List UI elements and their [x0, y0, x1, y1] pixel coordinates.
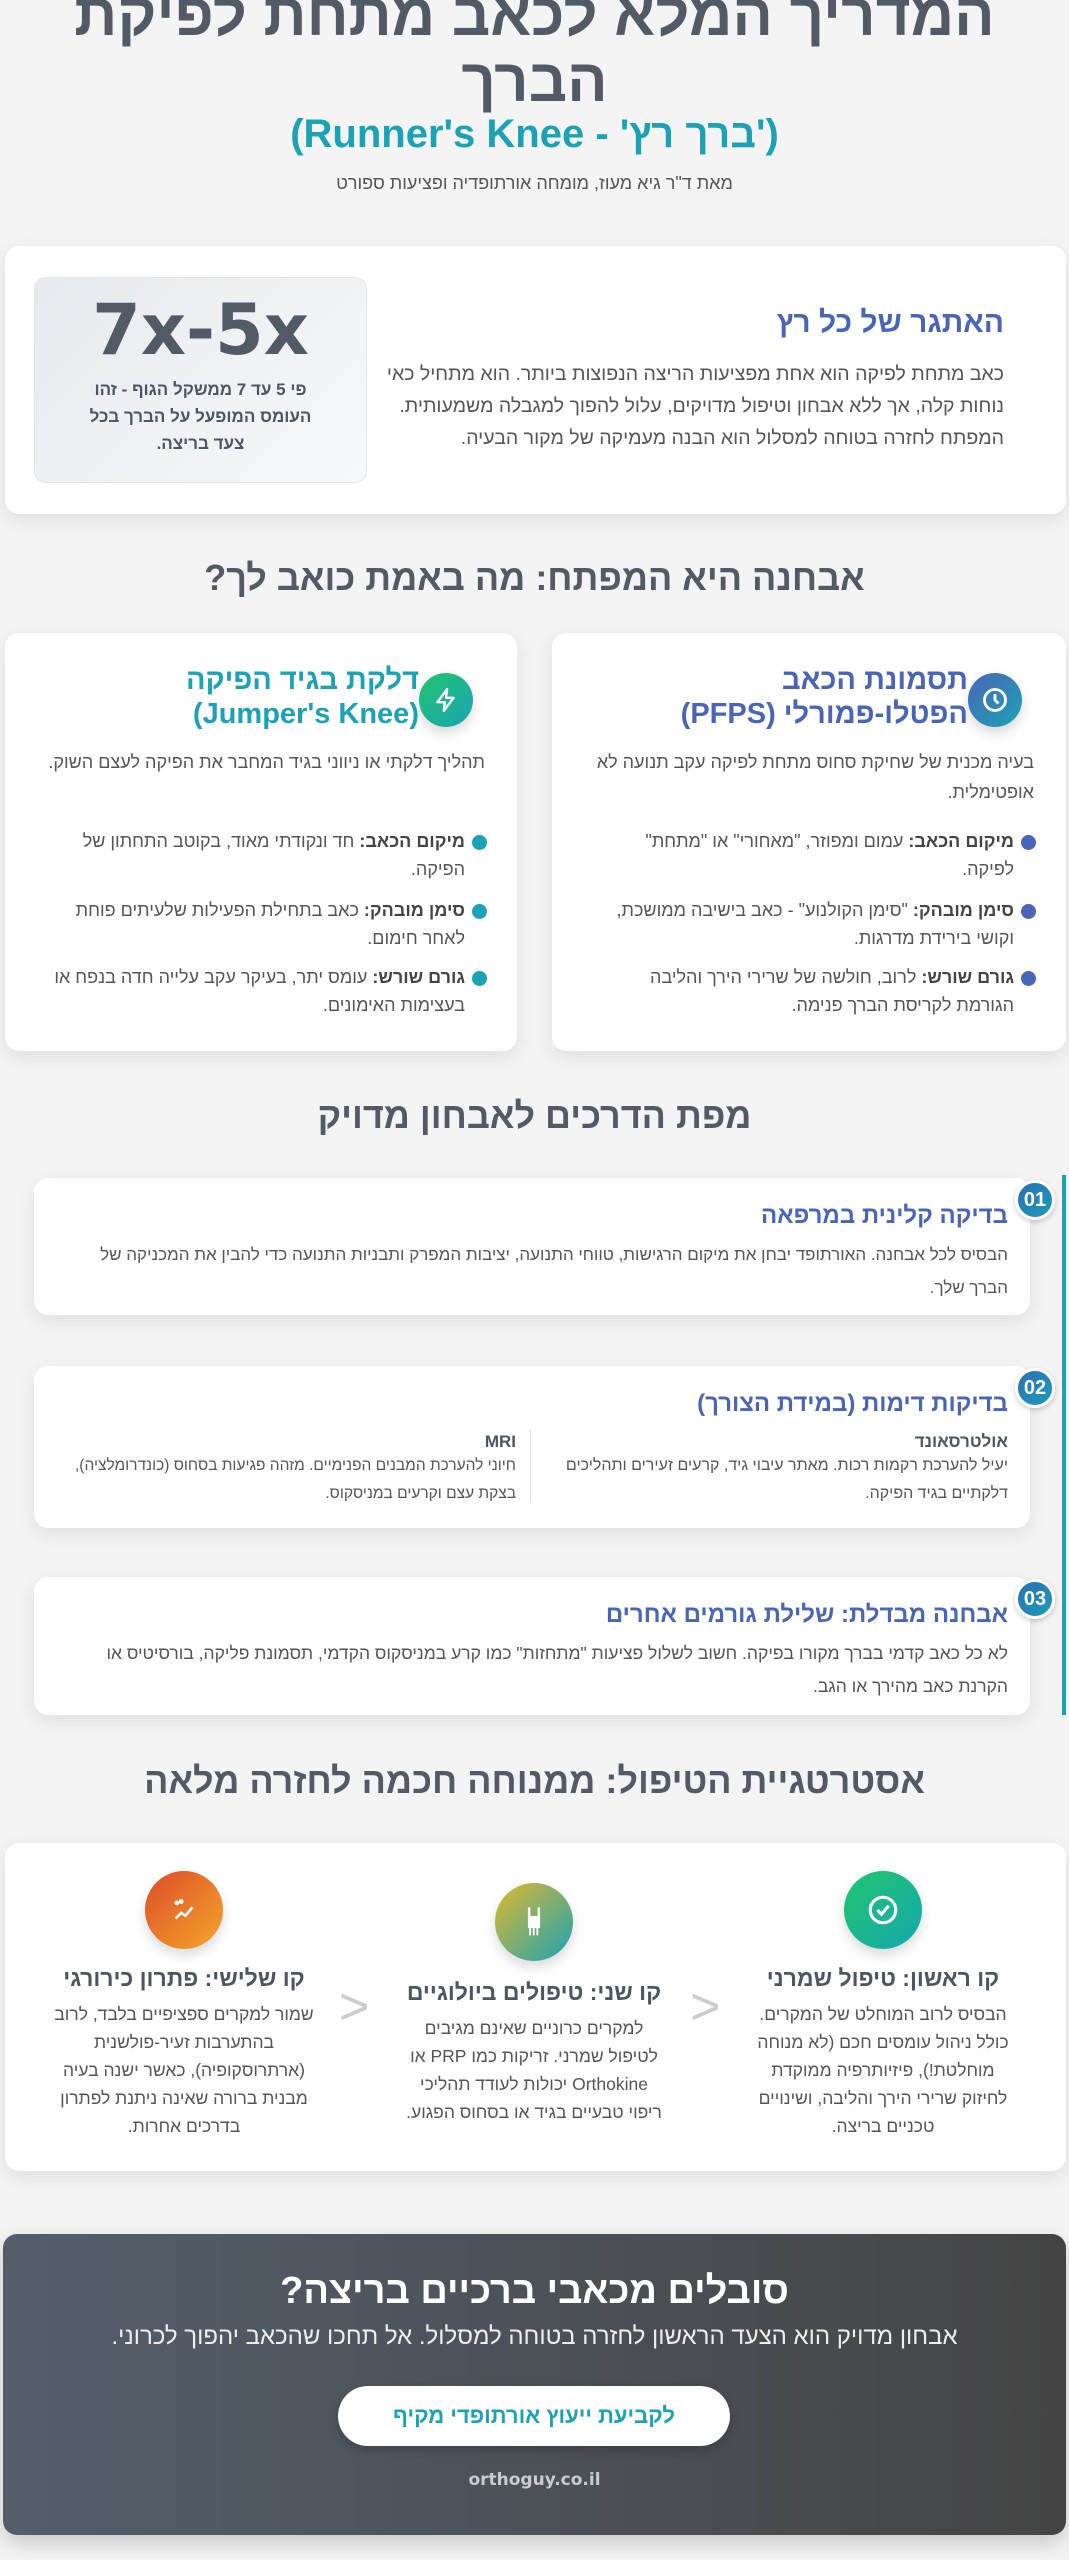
- bullet list: PFPS: גורם שורש: לרוב, חולשה של שרירי הירך והליבה הגורמת לקריסת הברך פנימה.: [650, 967, 1014, 1015]
- panel: intro: [5, 246, 1066, 514]
- arrow: <: [339, 1978, 369, 2036]
- subtitle: ('ברך רץ' - Runner's Knee): [290, 112, 779, 156]
- text block: intro: [387, 363, 1004, 449]
- MRI: חיוני להערכת המבנים הפנימיים. מזהה פגיעות בסחוס (כונדרומלציה), בצקת עצם וקרעים במניסקוס.: [75, 1457, 516, 1502]
- column: third line: קו שלישי: פתרון כירורגי: [63, 1965, 305, 1991]
- ultrasound: אולטרסאונד: [915, 1432, 1008, 1451]
- heading: diagnosis: אבחנה היא המפתח: מה באמת כואב לך?: [204, 557, 865, 598]
- step 2 title: בדיקות דימות (במידת הצורך): [697, 1390, 1008, 1417]
- stat box: פי 5 עד 7 ממשקל הגוף - זהו העומס המופעל על הברך בכל צעד בריצה.: [90, 380, 311, 453]
- heading: Jumper's Knee: [186, 664, 419, 730]
- column: first line: [757, 1871, 1009, 2136]
- heading: PFPS: תסמונת הכאב: [782, 664, 968, 696]
- website: orthoguy.co.il: [468, 2470, 601, 2490]
- icon: clock: [968, 673, 1022, 727]
- column: third line: [54, 1871, 314, 2136]
- step 2 card: [34, 1366, 1030, 1528]
- bullet list: jumper: [54, 831, 487, 1015]
- badge 03: 03: [1024, 1588, 1046, 1610]
- badge 03: [1015, 1579, 1055, 1619]
- bullet list: jumper: מיקום הכאב: חד ונקודתי מאוד, בקוטב התחתון של הפיקה.: [83, 831, 465, 879]
- column: first line: קו ראשון: טיפול שמרני: [767, 1965, 999, 1991]
- MRI: [75, 1432, 516, 1502]
- badge 02: [1015, 1368, 1055, 1408]
- heading: PFPS: הפטלו-פמורלי (PFPS): [681, 698, 968, 730]
- step 3 card: [34, 1577, 1030, 1715]
- heading: Jumper's Knee: (Jumper's Knee): [193, 698, 419, 730]
- step 1 text: הבסיס לכל אבחנה. האורתופד יבחן את מיקום הרגישות, טווחי התנועה, יציבות המפרק ותבניות התנועה כדי להבין את המכניקה של הברך שלך.: [100, 1245, 1008, 1297]
- icon: bolt: [419, 673, 473, 727]
- heading: roadmap: מפת הדרכים לאבחון מדויק: [318, 1095, 751, 1136]
- CTA heading: סובלים מכאבי ברכיים בריצה?: [280, 2270, 789, 2312]
- bullet list: PFPS: מיקום הכאב: עמום ומפוזר, "מאחורי" או "מתחת" לפיקה.: [645, 831, 1014, 879]
- CTA button: [338, 2386, 730, 2446]
- column: third line: שמור למקרים ספציפיים בלבד, לרוב בהתערבות זעיר-פולשנית (ארתרוסקופיה), כאשר ישנה בעיה מבנית ברורה שאינה ניתנת לפתרון בדרכים אחרות.: [54, 2004, 314, 2136]
- MRI: MRI: [485, 1432, 516, 1451]
- heading: challenge: האתגר של כל רץ: [777, 306, 1004, 339]
- column: second line: [406, 1883, 662, 2122]
- column: first line: הבסיס לרוב המוחלט של המקרים. כולל ניהול עומסים חכם (לא מנוחה מוחלטת!), פיזיותרפיה ממוקדת לחיזוק שרירי הירך והליבה, ושינויים טכניים בריצה.: [757, 2004, 1009, 2136]
- stat box: [34, 277, 367, 483]
- badge 01: [1015, 1180, 1055, 1220]
- timeline: [32, 1175, 1066, 1724]
- badge 02: 02: [1024, 1376, 1046, 1398]
- bullet list: PFPS: סימן מובהק: "סימן הקולנוע" - כאב בישיבה ממושכת, וקושי בירידת מדרגות.: [617, 900, 1014, 948]
- text: jumper description: תהליך דלקתי או ניווני בגיד המחבר את הפיקה לעצם השוק.: [48, 752, 485, 772]
- icon: chart: [145, 1871, 223, 1949]
- panel: PFPS: [552, 633, 1066, 1051]
- step 3 text: לא כל כאב קדמי בברך מקורו בפיקה. חשוב לשלול פציעות "מתחזות" כמו קרע במניסקוס הקדמי, תסמונת פליקה, בורסיטיס או הקרנת כאב מהירך או הגב.: [106, 1643, 1008, 1696]
- stat box: 7x-5x: [92, 289, 309, 371]
- CTA text: אבחון מדויק הוא הצעד הראשון לחזרה בטוחה למסלול. אל תחכו שהכאב יהפוך לכרוני.: [111, 2323, 958, 2350]
- panel: treatment: [5, 1843, 1066, 2171]
- badge 01: 01: [1024, 1188, 1046, 1210]
- heading: Jumper's Knee: דלקת בגיד הפיקה: [186, 664, 419, 696]
- icon: syringe: [495, 1883, 573, 1961]
- bullet list: jumper: סימן מובהק: כאב בתחילת הפעילות שלעיתים פוחת לאחר חימום.: [76, 900, 465, 948]
- bullet list: PFPS: [617, 831, 1036, 1015]
- step 1 title: בדיקה קלינית במרפאה: [761, 1202, 1008, 1229]
- text: PFPS description: בעיה מכנית של שחיקת סחוס מתחת לפיקה עקב תנועה לא אופטימלית.: [597, 752, 1034, 802]
- heading: treatment: אסטרטגיית הטיפול: ממנוחה חכמה לחזרה מלאה: [144, 1760, 925, 1801]
- bullet list: jumper: גורם שורש: עומס יתר, בעיקר עקב עלייה חדה בנפח או בעצימות האימונים.: [54, 967, 465, 1015]
- text block: intro: נוחות קלה, אך ללא אבחון וטיפול מדויקים, עלול להפוך למגבלה משמעותית.: [399, 395, 1004, 417]
- CTA button: לקביעת ייעוץ אורתופדי מקיף: [393, 2403, 675, 2428]
- text block: intro: המפתח לחזרה בטוחה למסלול הוא הבנה מעמיקה של מקור הבעיה.: [461, 427, 1004, 449]
- step 1 card: [34, 1178, 1030, 1315]
- icon: check: [844, 1871, 922, 1949]
- ultrasound: [566, 1432, 1008, 1502]
- arrow: <: [690, 1978, 720, 2036]
- heading: PFPS: [681, 664, 968, 730]
- panel: call to action: [3, 2234, 1066, 2535]
- text block: intro: כאב מתחת לפיקה הוא אחת מפציעות הריצה הנפוצות ביותר. הוא מתחיל כאי: [387, 363, 1004, 385]
- column: second line: קו שני: טיפולים ביולוגיים: [407, 1979, 661, 2005]
- panel: Jumper's Knee: [5, 633, 517, 1051]
- step 3 title: אבחנה מבדלת: שלילת גורמים אחרים: [606, 1601, 1008, 1628]
- ultrasound: יעיל להערכת רקמות רכות. מאתר עיבוי גיד, קרעים זעירים ותהליכים דלקתיים בגיד הפיקה.: [566, 1457, 1008, 1502]
- column: second line: למקרים כרוניים שאינם מגיבים לטיפול שמרני. זריקות כמו PRP או Orthokine יכולות לעודד תהליכי ריפוי טבעיים בגיד או בסחוס הפגוע.: [406, 2018, 662, 2122]
- byline: מאת ד"ר גיא מעוז, מומחה אורתופדיה ופציעות ספורט: [336, 173, 733, 193]
